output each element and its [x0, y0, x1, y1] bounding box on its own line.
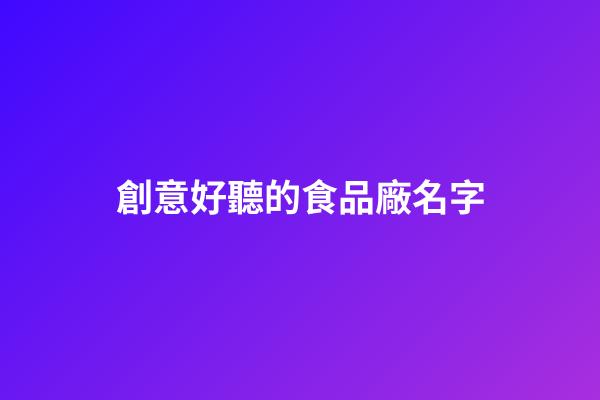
- title: 創意好聽的食品廠名字: [116, 178, 486, 219]
